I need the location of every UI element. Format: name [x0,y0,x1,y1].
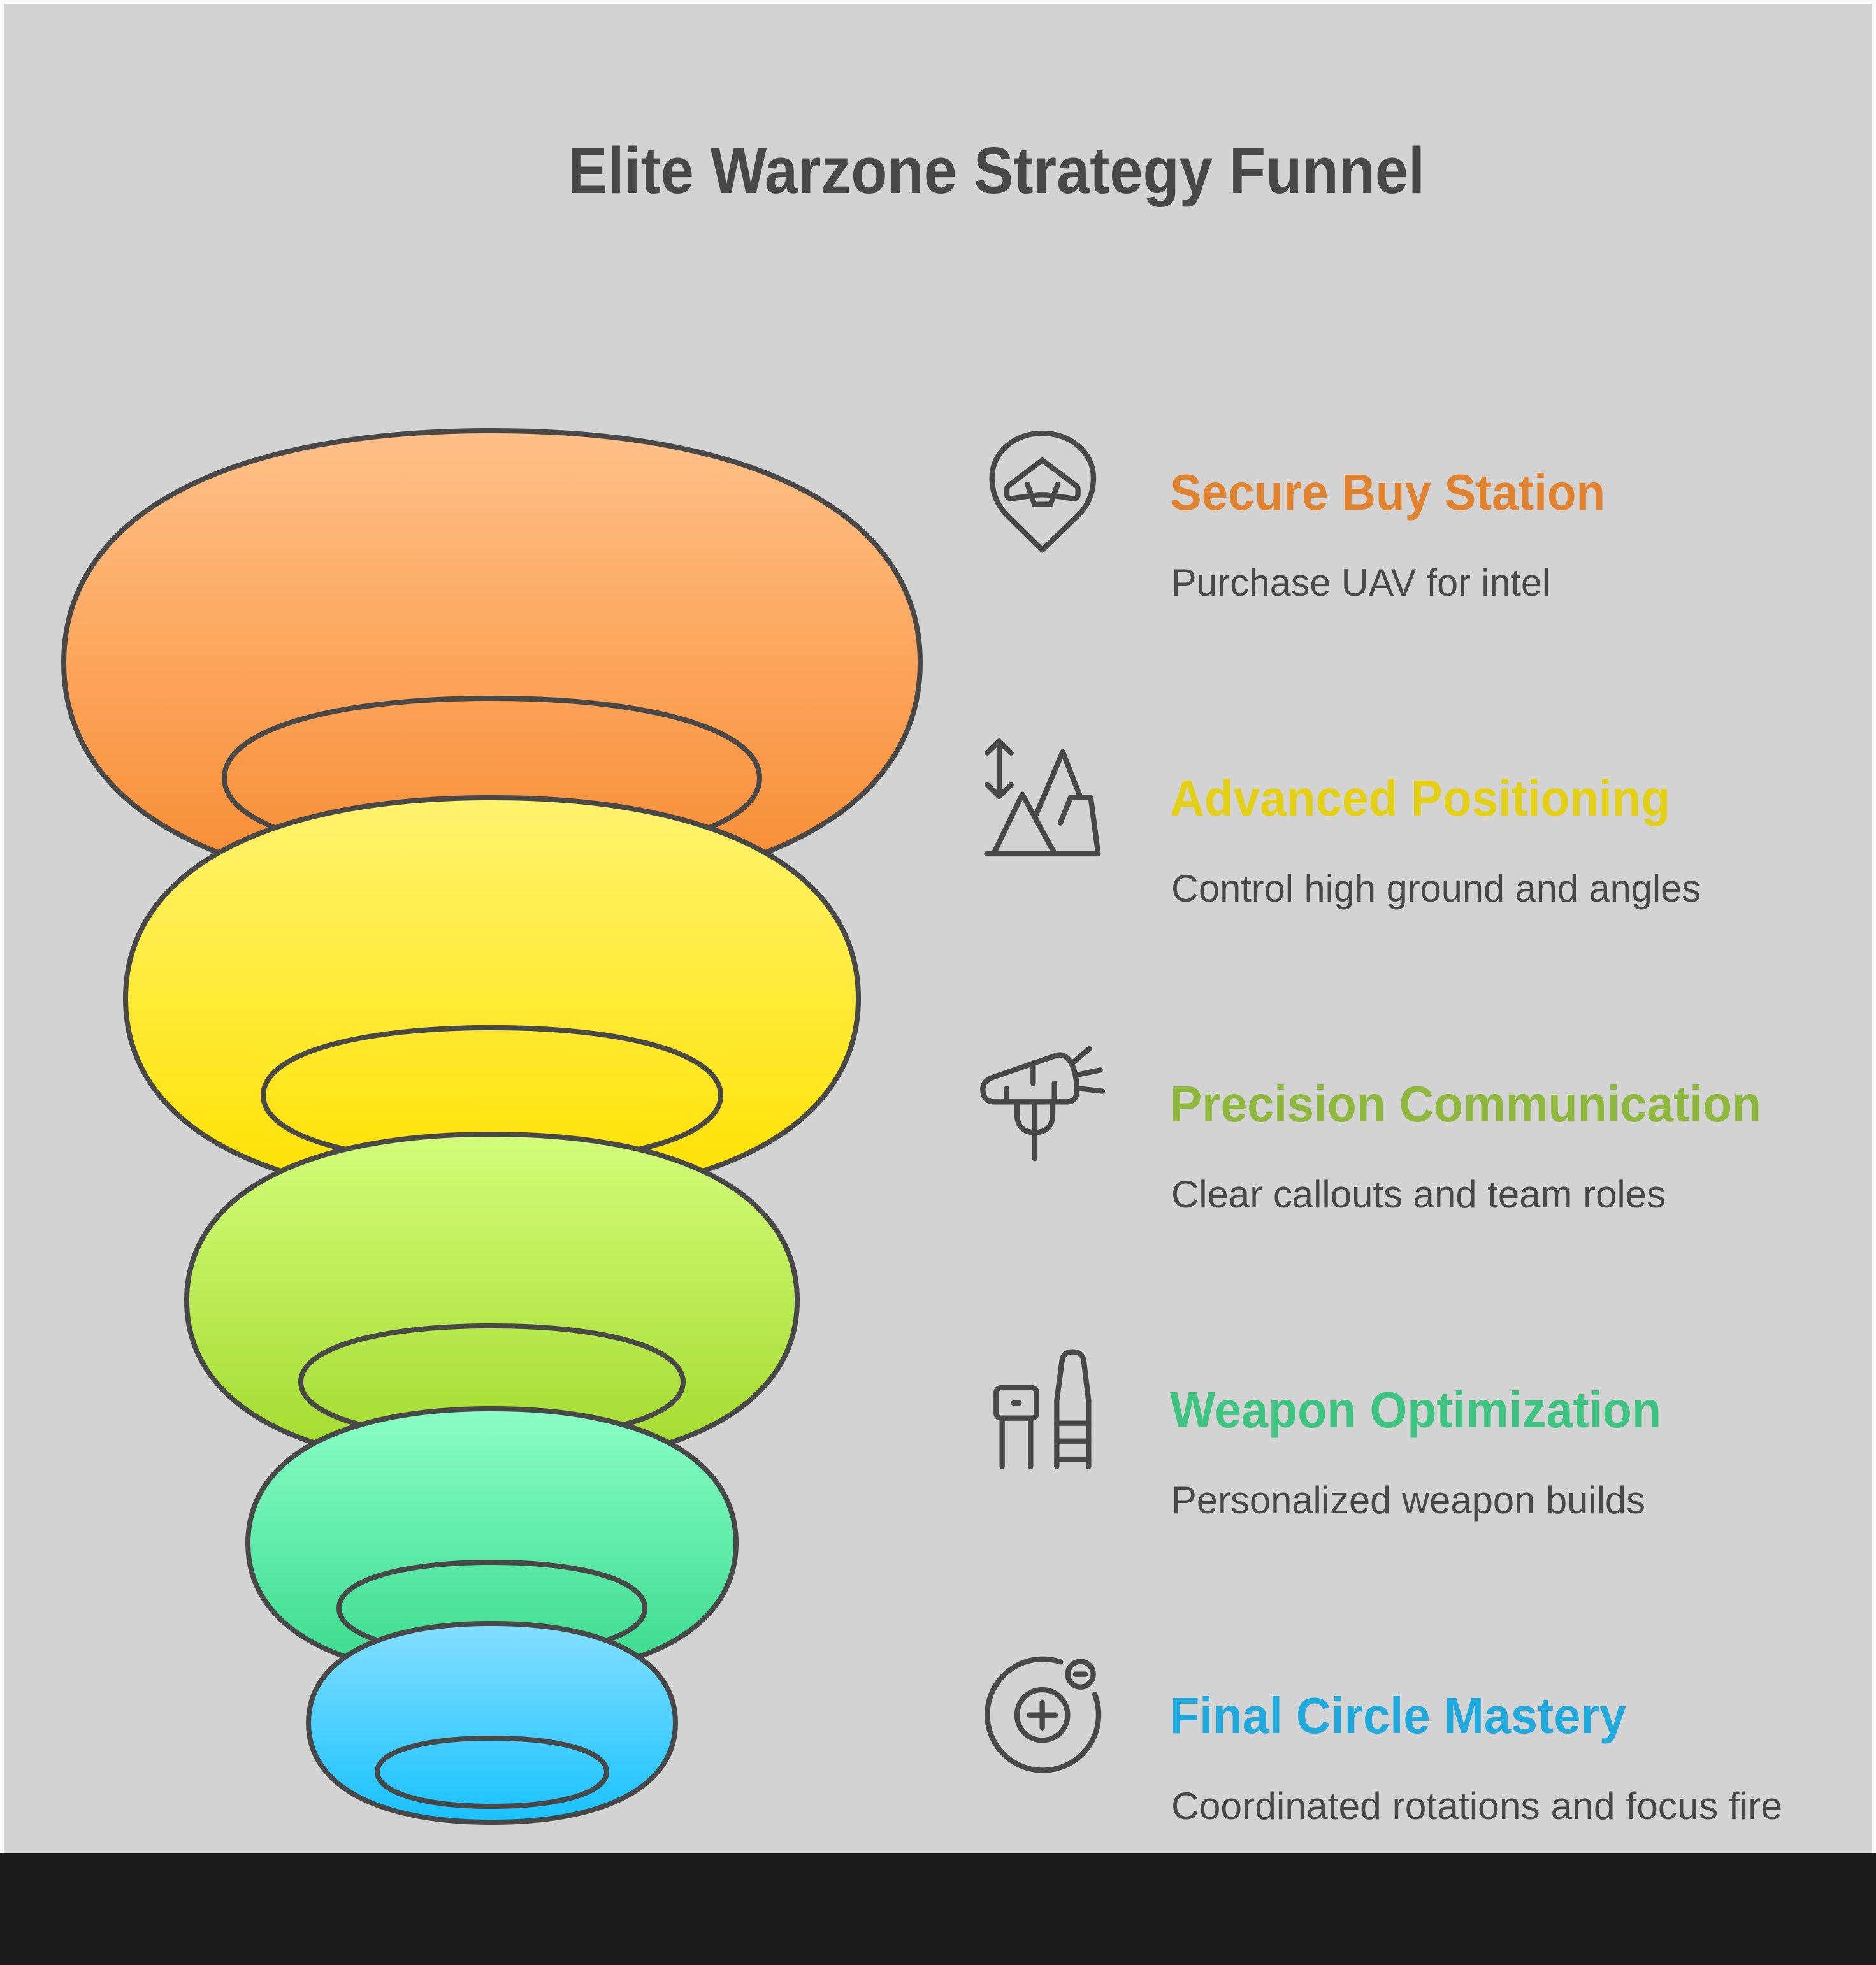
heading: Weapon Optimization [1170,1381,1661,1438]
description: Clear callouts and team roles [1171,1173,1666,1216]
step 2: Advanced Positioning [986,741,1701,910]
heading: Secure Buy Station [1170,464,1605,521]
description: Purchase UAV for intel [1171,561,1550,604]
description: Control high ground and angles [1171,867,1701,910]
funnel tier 2: yellow [126,798,858,1199]
funnel tier 3: lime green [187,1134,797,1467]
icon: map pin with glider [992,433,1093,550]
bottom dark band [0,1853,1876,1965]
funnel tier 5: blue [308,1623,675,1822]
funnel tier 1: orange [64,431,920,895]
title: Elite Warzone Strategy Funnel [568,134,1425,207]
heading: Advanced Positioning [1170,770,1670,826]
step 3: Precision Communication [983,1049,1761,1216]
step 4: Weapon Optimization [996,1352,1661,1522]
funnel chart [64,431,920,1822]
step 1: Secure Buy Station [992,433,1605,604]
icon: megaphone on stand [983,1049,1102,1158]
funnel tier 4: mint green [248,1409,736,1678]
description: Personalized weapon builds [1171,1479,1645,1522]
icon: mountains with vertical arrow [986,741,1098,854]
icon: magazine and bullet [996,1352,1088,1467]
icon: circle with plus and minus [987,1659,1099,1771]
description: Coordinated rotations and focus fire [1171,1785,1782,1827]
heading: Final Circle Mastery [1170,1687,1626,1744]
step 5: Final Circle Mastery [987,1659,1782,1827]
heading: Precision Communication [1170,1076,1761,1132]
